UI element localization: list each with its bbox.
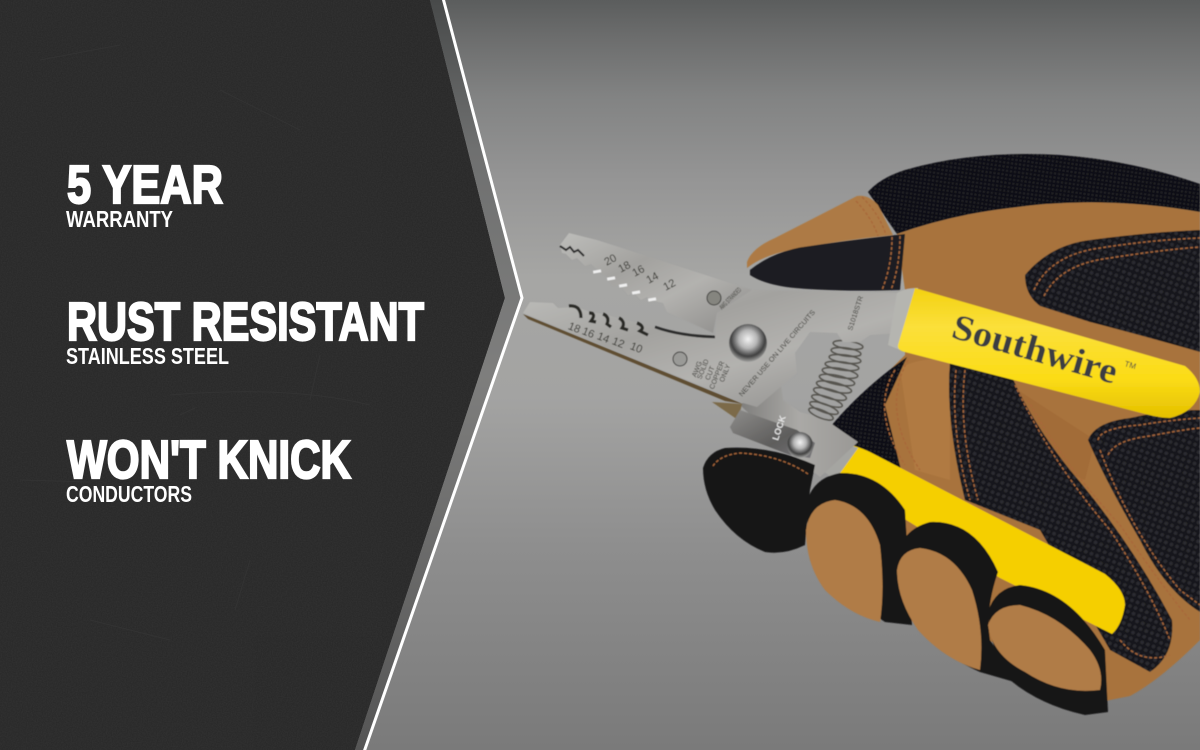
lower jaw gauge numbers: 14 [595,330,611,346]
upper jaw gauge numbers: 18 [616,259,633,276]
photo: gloved hand holding wire strippers [523,154,1200,715]
upper jaw tip teeth [560,246,584,256]
main jaw and pivot plate [523,290,900,407]
glove: second finger [897,522,1018,683]
upper jaw gauge numbers: 14 [644,270,661,287]
cutting slot [655,327,715,337]
jaw hole lower [673,352,687,366]
lock rivet [787,432,813,458]
gray chevron band [355,0,522,750]
glove: palm stitching [885,360,1200,658]
feature: won't knick conductors [66,430,351,507]
lower jaw gauge numbers: 18 [566,320,582,336]
feature: 5 year warranty [66,155,223,232]
glove: index finger tan tip [747,196,893,268]
upper jaw gauge numbers: 16 [630,263,647,280]
plate markings: ONLY [719,363,732,383]
lower handle yellow grip [830,444,1125,634]
lock tab [730,410,815,458]
glove: thumb stitching [713,453,808,474]
trademark: TM [1123,359,1137,371]
plate markings: AWG STRANDED [718,287,743,311]
spring [807,339,863,423]
feature: rust resistant stainless steel [66,292,424,369]
lower jaw gauge numbers [566,320,644,356]
glove: left palm pad [826,357,907,478]
upper jaw blade [560,233,752,333]
jaw lower edge shadow [523,314,743,404]
plate markings: S1018STR [847,295,865,332]
plate markings: CUT [705,365,717,381]
glove: upper palm pad [1025,230,1200,352]
panel: dark feature panel [0,0,520,750]
lower handle gray collar [822,443,858,480]
glove: center palm pad [949,362,1172,672]
heading: 5 year: 5 YEAR [67,155,223,215]
glove: right palm pad [1088,410,1200,612]
brand: Southwire: Southwire [948,306,1122,392]
lock label: LOCK [770,414,788,442]
glove: index finger black tip [750,234,905,291]
stripping notches [569,306,648,335]
heading: won't knick: WON'T KNICK [67,430,351,490]
plate markings: AWG [691,360,704,378]
plate markings: NEVER USE ON LIVE CIRCUITS [738,309,817,398]
lower arm [740,378,858,477]
upper jaw gauge numbers: 20 [602,252,619,269]
glove: finger stitching [856,197,900,290]
upper handle gray collar [888,288,918,352]
upper jaw gauge numbers [602,252,678,294]
pivot rivet [729,324,767,362]
upper jaw gauge numbers: 12 [661,277,678,294]
subheading: stainless steel: STAINLESS STEEL [66,343,229,369]
glove: first finger [806,473,912,625]
upper jaw bright notches [593,269,656,302]
plate markings: SOLID [696,358,711,380]
wire stripper tool [523,233,1200,634]
glove: thumb [703,448,815,553]
white chevron line [364,0,522,750]
lower jaw gauge numbers: 10 [628,340,644,356]
glove: palm [825,202,1200,705]
glove: index finger mesh [868,154,1200,234]
upper handle yellow grip [898,288,1200,418]
lower jaw gauge numbers: 12 [610,335,626,351]
heading: rust resistant: RUST RESISTANT [67,292,424,352]
jaw hole upper [707,291,721,305]
glove: upper pad stitching [1034,238,1200,296]
lower jaw gauge numbers: 16 [580,325,596,341]
bronze edge behind jaw [712,402,742,420]
glove: third finger [988,585,1108,715]
subheading: conductors: CONDUCTORS [66,481,192,507]
subheading: warranty: WARRANTY [66,206,173,232]
plate markings [691,287,865,398]
plate markings: COPPER [709,360,726,390]
